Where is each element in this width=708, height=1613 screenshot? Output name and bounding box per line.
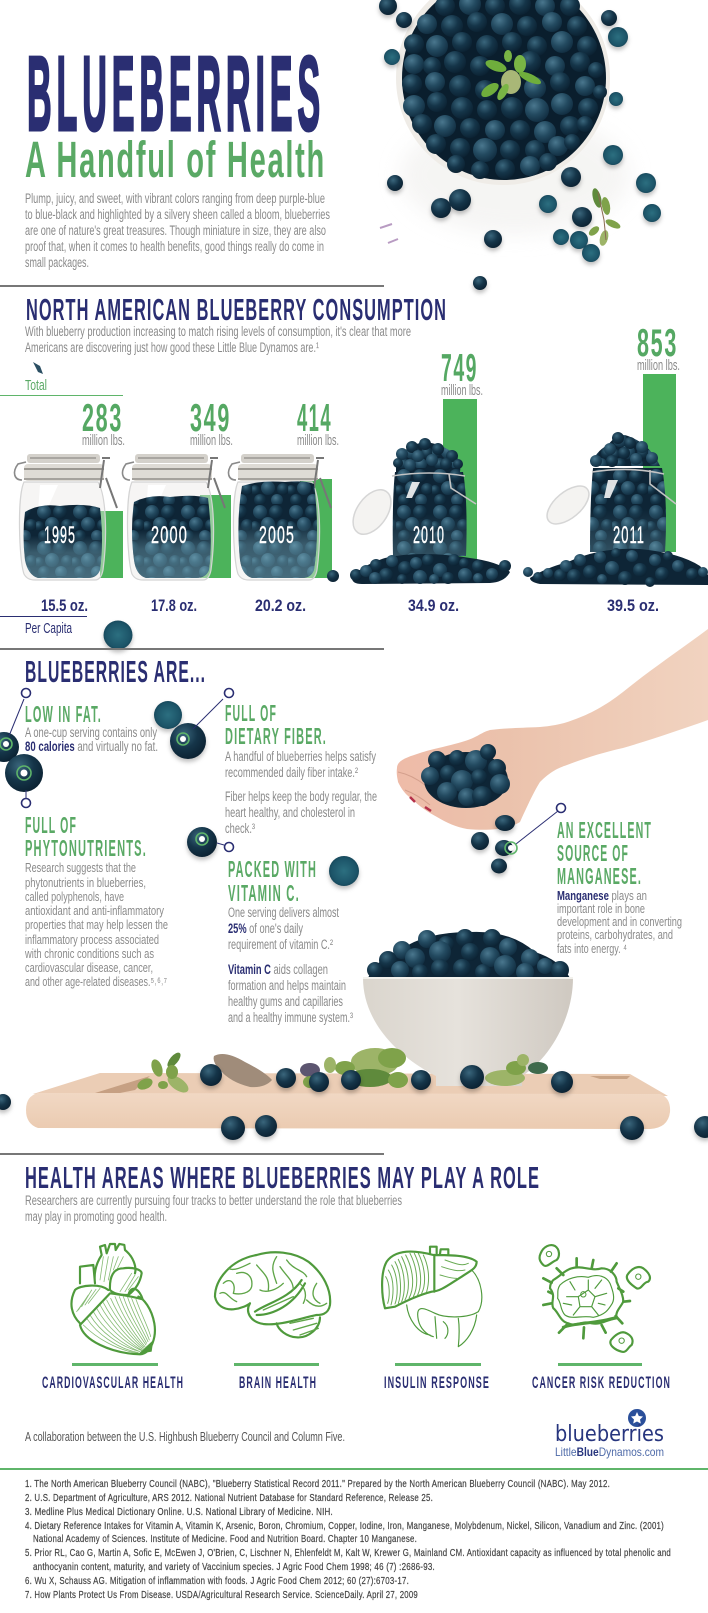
callout: vitamin C: VITAMIN C.	[228, 880, 300, 906]
jar: 2005	[229, 454, 331, 580]
callout: phytonutrients: phytonutrients in blueberries,	[25, 875, 146, 890]
intro paragraph: proof that, when it comes to health benefits, good things really do come in	[25, 239, 324, 254]
decorative blueberry near fiber	[154, 701, 182, 729]
references: 2. U.S. Department of Agriculture, ARS 2012. National Nutrient Database for Standard Reference, Release 25.	[25, 1493, 433, 1504]
callout: vitamin C: formation and helps maintain	[228, 978, 346, 993]
jar: 2000	[123, 454, 225, 580]
callout: low in fat: 80 calories and virtually no fat.	[25, 739, 158, 754]
callout: phytonutrients: Research suggests that the	[25, 860, 136, 875]
callout: vitamin C: One serving delivers almost	[228, 905, 339, 920]
health area labels	[42, 1374, 671, 1392]
health areas intro text: may play in promoting good health.	[25, 1209, 167, 1224]
legend: total	[0, 362, 123, 396]
callout: dietary fiber: DIETARY FIBER.	[225, 723, 327, 749]
jar: 2000: 2000	[151, 522, 188, 549]
callout: vitamin C: requirement of vitamin C.²	[228, 937, 333, 952]
callout: phytonutrients: antioxidant and anti-inflammatory	[25, 903, 164, 918]
callout: vitamin C: Vitamin C aids collagen	[228, 962, 328, 977]
references	[25, 1479, 671, 1601]
bar: 1995: million lbs.	[82, 432, 125, 449]
marker: manganese	[505, 804, 566, 854]
bar: 2011: million lbs.	[637, 357, 680, 374]
per capita values: 39.5 oz.	[607, 596, 659, 615]
callout: phytonutrients: PHYTONUTRIENTS.	[25, 835, 147, 861]
health areas intro text: Researchers are currently pursuing four tracks to better understand the role that blueberries	[25, 1193, 402, 1208]
icon: liver and organs	[382, 1247, 482, 1347]
top bowl of blueberries	[396, 0, 630, 235]
callout: manganese: Manganese plays an	[557, 888, 647, 903]
logo: blueberries	[555, 1409, 664, 1459]
marker: vitamin C	[187, 827, 234, 857]
consumption intro text: Americans are discovering just how good these Little Blue Dynamos are.¹	[25, 340, 319, 355]
scattered blueberries around top bowl	[379, 0, 661, 290]
callout: phytonutrients: with chronic conditions such as	[24, 946, 154, 961]
health area labels: INSULIN RESPONSE	[384, 1374, 490, 1392]
jar: 2010 overflowing	[345, 438, 511, 584]
references: National Academy of Sciences. Institute of Medicine. Food and Nutrition Board. Chapter 10 Manganese.	[33, 1534, 417, 1545]
callout: dietary fiber: check.³	[225, 821, 255, 836]
bar: 2000: million lbs.	[190, 432, 233, 449]
references: 7. How Plants Protect Us From Disease. USDA/Agricultural Research Service. ScienceDaily. April 27, 2009	[25, 1590, 418, 1601]
callout: vitamin C: and a healthy immune system.³	[228, 1010, 353, 1025]
per capita values: 15.5 oz.	[41, 596, 88, 615]
intro paragraph: are one of nature's great treasures. Though miniature in size, they are also	[25, 223, 326, 238]
subtitle: A Handful of Health	[25, 131, 326, 188]
callout: vitamin C: healthy gums and capillaries	[228, 994, 343, 1009]
callout: dietary fiber: heart healthy, and cholesterol in	[225, 805, 355, 820]
intro paragraph: small packages.	[25, 255, 89, 270]
jar: 1995	[15, 454, 117, 580]
jar lid 2011	[540, 479, 596, 531]
bar: 1995	[82, 397, 125, 578]
cutting board	[26, 1073, 670, 1129]
spoon	[214, 1054, 272, 1087]
callout: phytonutrients: FULL OF	[25, 812, 77, 838]
bar: 2005: million lbs.	[297, 432, 339, 449]
callout: dietary fiber: FULL OF	[225, 700, 277, 726]
icon: herb sprig on bowl	[479, 50, 543, 102]
references: anthocyanin content, maturity, and variety of Vaccinium species. J Agric Food Chem 1998; 46 (7) :2686-93.	[33, 1562, 435, 1573]
herb sprig beside bowl	[380, 187, 622, 247]
jar: 2005: 2005	[259, 522, 295, 549]
marker: low in fat	[0, 688, 30, 762]
jar: 2011 overflowing	[523, 432, 708, 587]
health area labels: BRAIN HEALTH	[239, 1374, 317, 1392]
logo: blueberries: LittleBlueDynamos.com	[555, 1445, 664, 1459]
herbs on board	[136, 1048, 548, 1096]
references: 6. Wu X, Schauss AG. Mitigation of inflammation with foods. J Agric Food Chem 2012; 60 (27):6703-17.	[25, 1576, 409, 1587]
jar: 2010 overflowing: 2010	[413, 522, 445, 549]
callout: dietary fiber: recommended daily fiber intake.²	[225, 765, 358, 780]
health area labels: CARDIOVASCULAR HEALTH	[42, 1374, 184, 1392]
callout: phytonutrients	[5, 754, 168, 989]
bar: 2005	[297, 397, 339, 578]
callout: dietary fiber: Fiber helps keep the body regular, the	[225, 789, 377, 804]
consumption intro text: With blueberry production increasing to match rising levels of consumption, it's clear that more	[25, 324, 411, 339]
per capita values	[41, 596, 659, 615]
icon: heart	[71, 1244, 155, 1354]
callout: phytonutrients: inflammatory process associated	[25, 932, 159, 947]
bar: 1995: 283	[82, 397, 123, 440]
marker: phytonutrients	[5, 754, 43, 808]
intro paragraph	[25, 191, 330, 270]
callout: low in fat: A one-cup serving contains only	[25, 725, 157, 740]
hand holding blueberries	[397, 629, 708, 830]
per capita values: 20.2 oz.	[255, 596, 306, 615]
callout: phytonutrients: called polyphenols, have	[25, 889, 124, 904]
blueberries on and around board	[0, 1064, 708, 1140]
callout: dietary fiber	[170, 688, 377, 836]
per capita values: 34.9 oz.	[408, 596, 459, 615]
callout: phytonutrients: cardiovascular disease, cancer,	[25, 960, 153, 975]
health areas intro text	[25, 1193, 402, 1224]
callout: manganese	[505, 804, 682, 956]
legend: per capita	[0, 616, 87, 637]
callout: phytonutrients: and other age-related diseases.⁵˒⁶˒⁷	[25, 974, 167, 989]
callout: vitamin C: PACKED WITH	[228, 856, 317, 882]
bar: 2010: million lbs.	[441, 382, 483, 399]
bar: 2005: 414	[297, 397, 332, 440]
callout: low in fat	[0, 688, 158, 762]
legend: per capita: Per Capita	[25, 620, 72, 637]
legend: total: Total	[25, 377, 47, 394]
intro paragraph: Plump, juicy, and sweet, with vibrant colors ranging from deep purple-blue	[25, 191, 325, 206]
health area rules	[72, 1363, 642, 1366]
heading: blueberries are: BLUEBERRIES ARE...	[25, 654, 206, 689]
collaboration credit: A collaboration between the U.S. Highbush Blueberry Council and Column Five.	[25, 1429, 345, 1444]
jar: 2011 overflowing: 2011	[613, 522, 645, 549]
callout: manganese: fats into energy. ⁴	[557, 941, 627, 956]
white bowl of blueberries	[363, 929, 573, 1086]
callout: phytonutrients: properties that may help lessen the	[25, 917, 168, 932]
callout: vitamin C: 25% of one's daily	[228, 921, 303, 936]
consumption intro text	[25, 324, 411, 355]
loose blueberry beside jars	[327, 570, 339, 582]
per capita values: 17.8 oz.	[151, 596, 197, 615]
jar: 1995: 1995	[44, 522, 76, 549]
blueberry above divider	[104, 620, 132, 650]
marker: fiber	[170, 688, 234, 759]
logo: blueberries: blueberries	[555, 1422, 664, 1447]
references: 3. Medline Plus Medical Dictionary Online. U.S. National Library of Medicine. NIH.	[25, 1507, 333, 1518]
bar: 2010: 749	[441, 347, 478, 390]
icon: brain	[215, 1252, 330, 1337]
callout: low in fat: LOW IN FAT.	[25, 701, 102, 727]
bar: 2010	[441, 347, 483, 562]
callout: manganese: important role in bone	[557, 901, 645, 916]
callout: vitamin C	[187, 827, 353, 1025]
icon: cancer cells	[540, 1245, 650, 1352]
bar: 2011	[637, 322, 680, 552]
intro paragraph: to blue-black and highlighted by a silvery sheen called a bloom, blueberries	[25, 207, 330, 222]
bar: 2000	[190, 397, 233, 578]
jar lid 2010	[345, 483, 399, 541]
bar: 2000: 349	[190, 397, 231, 440]
falling blueberries	[471, 815, 515, 874]
callout: dietary fiber: A handful of blueberries helps satisfy	[225, 749, 376, 764]
decorative blueberry near vitamin C	[329, 856, 359, 886]
